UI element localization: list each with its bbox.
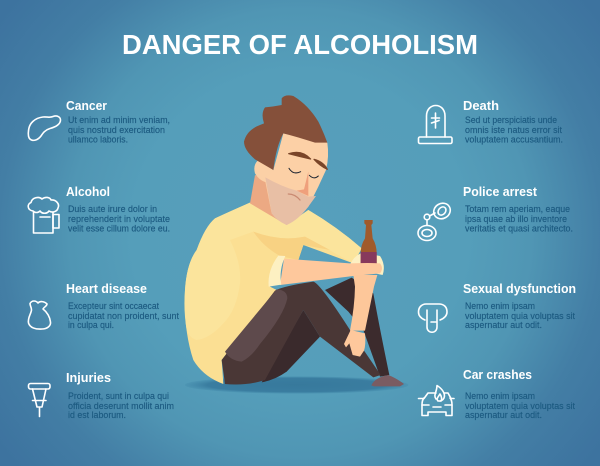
description	[68, 204, 170, 234]
description: omnis iste natus error sit	[465, 125, 562, 136]
panel: police arrest	[418, 185, 573, 240]
heading: Death	[463, 99, 499, 113]
description: aspernatur aut odit.	[465, 410, 542, 421]
heading: Alcohol	[66, 185, 110, 199]
under thigh	[262, 310, 320, 382]
description	[465, 301, 575, 331]
hanging hand	[344, 330, 365, 357]
icon: dysfunction	[418, 304, 447, 332]
description: officia deserunt mollit anim	[68, 401, 174, 412]
description: Totam rem aperiam, eaque	[465, 204, 570, 215]
description: ipsa quae ab illo inventore	[465, 214, 567, 225]
icon: liver	[28, 116, 60, 140]
panel: death	[418, 99, 563, 146]
sweater	[185, 203, 362, 384]
mouth	[288, 194, 300, 200]
description: ullamco laboris.	[68, 134, 128, 146]
shoe	[371, 375, 404, 386]
heading: Sexual dysfunction	[463, 282, 576, 296]
icon: crutch	[28, 384, 50, 416]
description: cupidatat non proident, sunt	[68, 311, 179, 322]
description: velit esse cillum dolore eu.	[68, 224, 170, 234]
description: aspernatur aut odit.	[465, 320, 542, 331]
eyes	[289, 168, 318, 178]
bottle	[361, 220, 377, 264]
far cuff	[351, 253, 384, 275]
panel: heart disease	[28, 282, 179, 331]
panel: car crashes	[418, 368, 575, 421]
heading: Police arrest	[463, 185, 538, 199]
thigh highlight	[225, 289, 287, 362]
sweater chest shade	[253, 232, 330, 260]
ear	[254, 160, 273, 183]
hanging arm	[350, 275, 377, 331]
panel: injuries	[28, 371, 174, 421]
description	[465, 204, 573, 234]
heading: Cancer	[66, 99, 107, 113]
description: Ut enim ad minim veniam,	[68, 115, 170, 126]
far leg	[325, 278, 389, 377]
near cuff	[269, 256, 285, 287]
icon: burning car	[418, 386, 454, 416]
heading: Car crashes	[463, 368, 532, 382]
description: Nemo enim ipsam	[465, 301, 535, 312]
icon: handcuffs	[418, 200, 453, 240]
description: veritatis et quasi architecto.	[465, 224, 573, 234]
illustration: man with bottle	[184, 95, 408, 394]
description: voluptatem quia voluptas sit	[465, 311, 575, 322]
panel: alcohol	[28, 185, 170, 234]
head	[244, 95, 328, 225]
panel: cancer	[28, 99, 170, 146]
description	[465, 115, 563, 146]
eyebrows	[289, 152, 327, 169]
icon: gravestone	[418, 106, 452, 144]
nose	[297, 172, 308, 196]
hair	[244, 95, 327, 170]
icon: heart	[28, 301, 51, 329]
description: id est laborum.	[68, 410, 126, 421]
neck	[250, 175, 308, 225]
description	[68, 391, 174, 421]
sweater light areas	[184, 203, 362, 340]
description: Sed ut perspiciatis unde	[465, 115, 557, 126]
icon: beer mug	[28, 197, 59, 233]
description	[68, 301, 179, 331]
near leg	[222, 282, 381, 384]
heading: Heart disease	[66, 282, 147, 296]
stubble	[265, 177, 316, 225]
forearm and hand	[280, 259, 382, 285]
description: Duis aute irure dolor in	[68, 204, 157, 215]
description	[465, 391, 575, 421]
face	[265, 133, 328, 225]
floor shadow	[185, 376, 408, 394]
description: Proident, sunt in culpa qui	[68, 391, 169, 402]
heading: Injuries	[66, 371, 111, 385]
description: quis nostrud exercitation	[68, 125, 165, 136]
panel: sexual dysfunction	[418, 282, 576, 332]
bottle label	[361, 252, 377, 264]
description: Excepteur sint occaecat	[68, 301, 159, 312]
description	[68, 115, 170, 146]
description: in culpa qui.	[68, 320, 114, 331]
description: Nemo enim ipsam	[465, 391, 535, 402]
description: reprehenderit in voluptate	[68, 214, 170, 225]
title: DANGER OF ALCOHOLISM	[122, 29, 478, 60]
description: voluptatem quia voluptas sit	[465, 401, 575, 412]
description: voluptatem accusantium.	[465, 134, 563, 146]
